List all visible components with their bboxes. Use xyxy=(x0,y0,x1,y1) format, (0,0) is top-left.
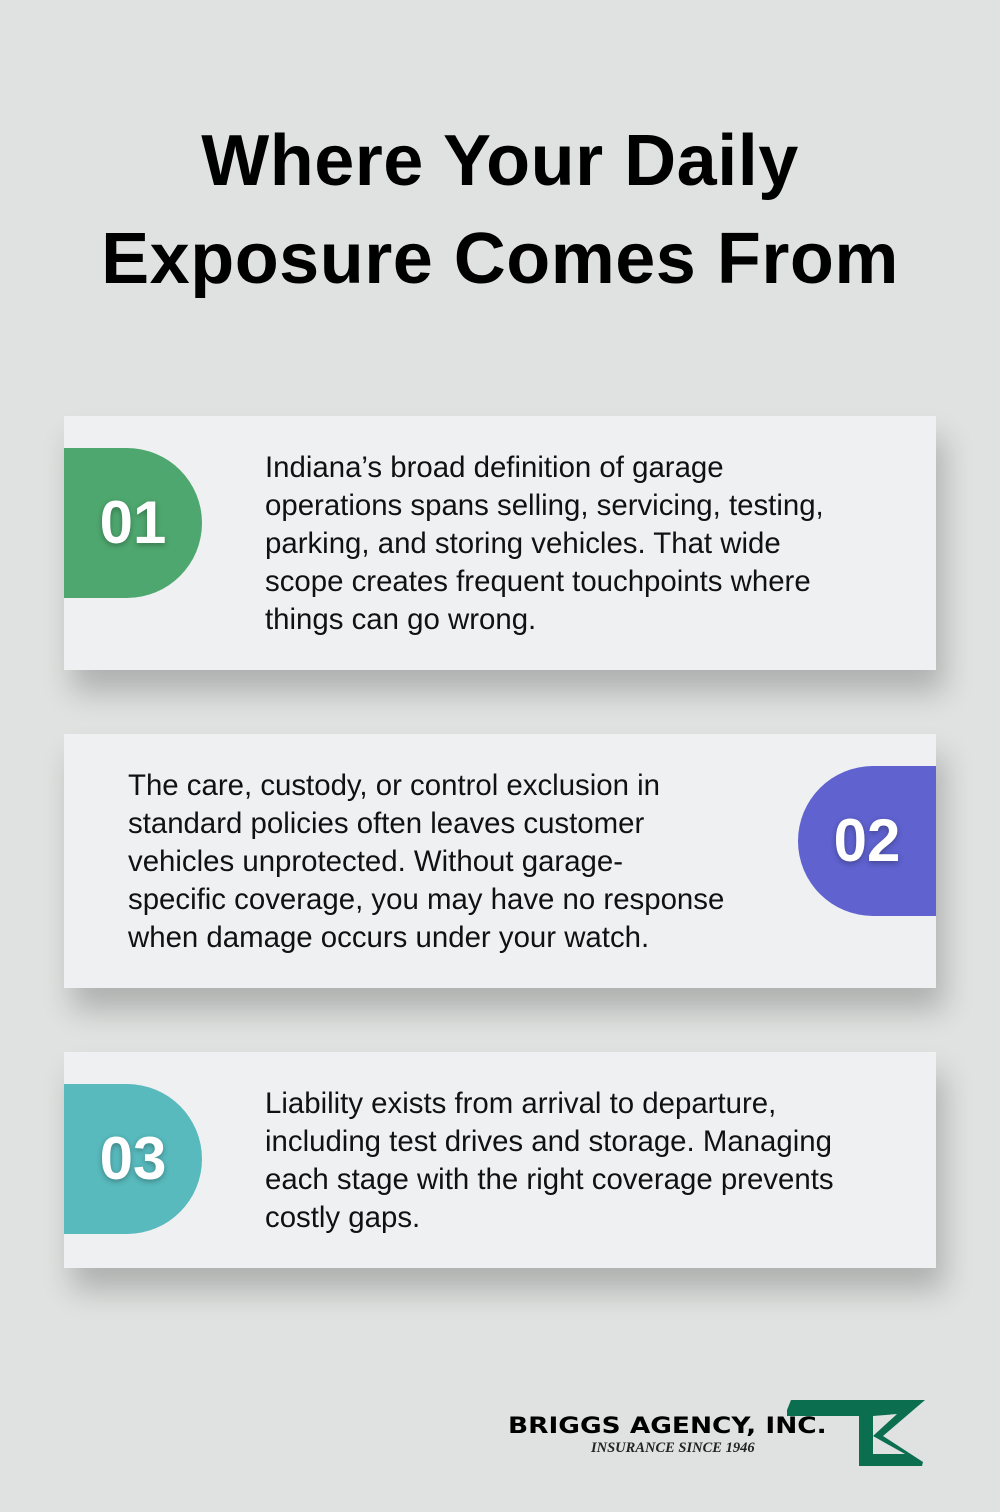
text 03: each stage with the right coverage prevents xyxy=(265,1163,834,1196)
panel: 01 xyxy=(64,416,936,670)
title: Where Your Daily xyxy=(201,121,799,201)
text 01: things can go wrong. xyxy=(265,603,536,636)
badge 01 xyxy=(64,448,202,598)
panel: 03 xyxy=(64,1052,936,1268)
badge 03 xyxy=(64,1084,202,1234)
text 03: costly gaps. xyxy=(265,1201,420,1234)
title: Exposure Comes From xyxy=(101,219,899,299)
text 01 xyxy=(265,451,824,636)
panel: 02 xyxy=(64,734,936,988)
text 02: standard policies often leaves customer xyxy=(128,807,644,840)
badge 01: 01 xyxy=(100,489,166,556)
badge 03: 03 xyxy=(100,1125,166,1192)
logo mark xyxy=(787,1400,925,1466)
text 02: when damage occurs under your watch. xyxy=(128,921,649,954)
text 01: Indiana’s broad definition of garage xyxy=(265,451,724,484)
text 02: specific coverage, you may have no response xyxy=(128,883,724,916)
text 02: vehicles unprotected. Without garage- xyxy=(128,845,623,878)
logo xyxy=(508,1400,925,1466)
text 03: including test drives and storage. Managing xyxy=(265,1125,832,1158)
text 01: operations spans selling, servicing, testing, xyxy=(265,489,824,522)
text 01: parking, and storing vehicles. That wide xyxy=(265,527,781,560)
text 03: Liability exists from arrival to departure, xyxy=(265,1087,776,1120)
text 02: The care, custody, or control exclusion in xyxy=(128,769,660,802)
text 01: scope creates frequent touchpoints where xyxy=(265,565,811,598)
title xyxy=(101,121,899,299)
text 03 xyxy=(265,1087,834,1234)
logo tagline: INSURANCE SINCE 1946 xyxy=(591,1440,755,1456)
badge 02 xyxy=(798,766,936,916)
text 02 xyxy=(128,769,724,954)
logo text: BRIGGS AGENCY, INC. xyxy=(508,1414,827,1439)
badge 02: 02 xyxy=(834,807,900,874)
